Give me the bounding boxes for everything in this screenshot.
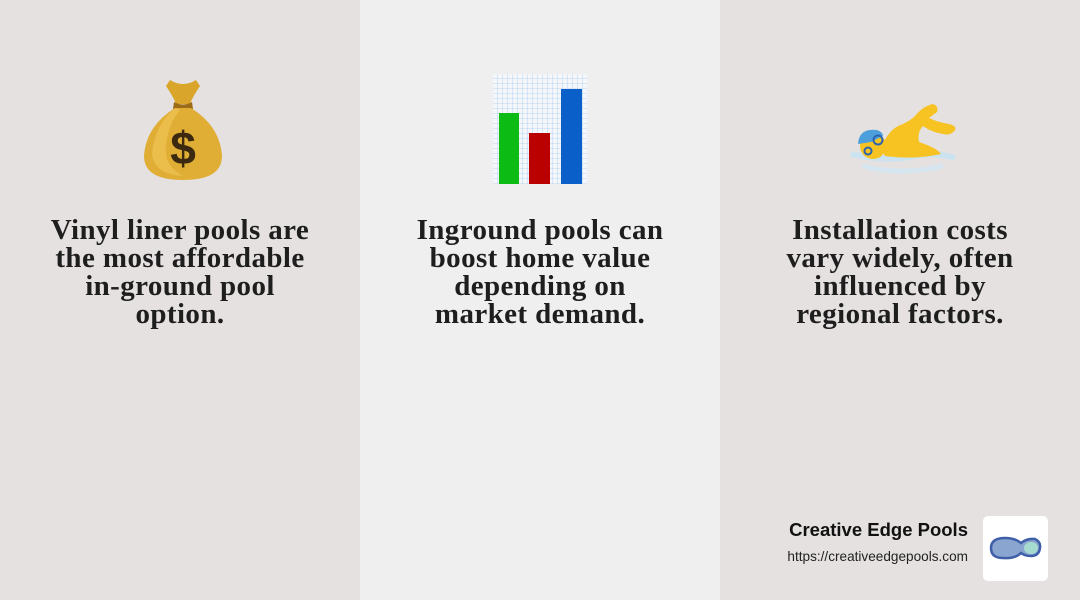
brand name: Creative Edge Pools: [789, 519, 968, 540]
heading: installation costs: influenced by: [814, 270, 986, 302]
brand url: https://creativeedgepools.com: [787, 549, 968, 564]
icon: money bag: [144, 80, 222, 180]
heading: home value: boost home value: [430, 242, 650, 274]
icon: swimmer: [850, 104, 956, 174]
heading: installation costs: vary widely, often: [786, 242, 1014, 274]
heading: affordability: the most affordable: [55, 242, 305, 274]
icon: money bag: $: [170, 122, 196, 174]
heading: home value: market demand.: [435, 298, 645, 330]
heading: installation costs: regional factors.: [796, 298, 1004, 330]
logo: [983, 516, 1048, 581]
heading: affordability: Vinyl liner pools are: [51, 214, 309, 246]
heading: home value: Inground pools can: [417, 214, 663, 246]
heading: affordability: in-ground pool: [85, 270, 275, 302]
heading: affordability: option.: [135, 298, 225, 330]
heading: home value: depending on: [454, 270, 626, 302]
heading: home value: [417, 214, 663, 330]
panel: affordability: [0, 0, 360, 600]
panel: installation costs: [720, 0, 1080, 600]
brand block: [787, 516, 1048, 581]
heading: installation costs: Installation costs: [792, 214, 1008, 246]
panel: home value: [360, 0, 720, 600]
heading: installation costs: [786, 214, 1014, 330]
icon: bar chart: [493, 74, 587, 184]
heading: affordability: [51, 214, 309, 330]
